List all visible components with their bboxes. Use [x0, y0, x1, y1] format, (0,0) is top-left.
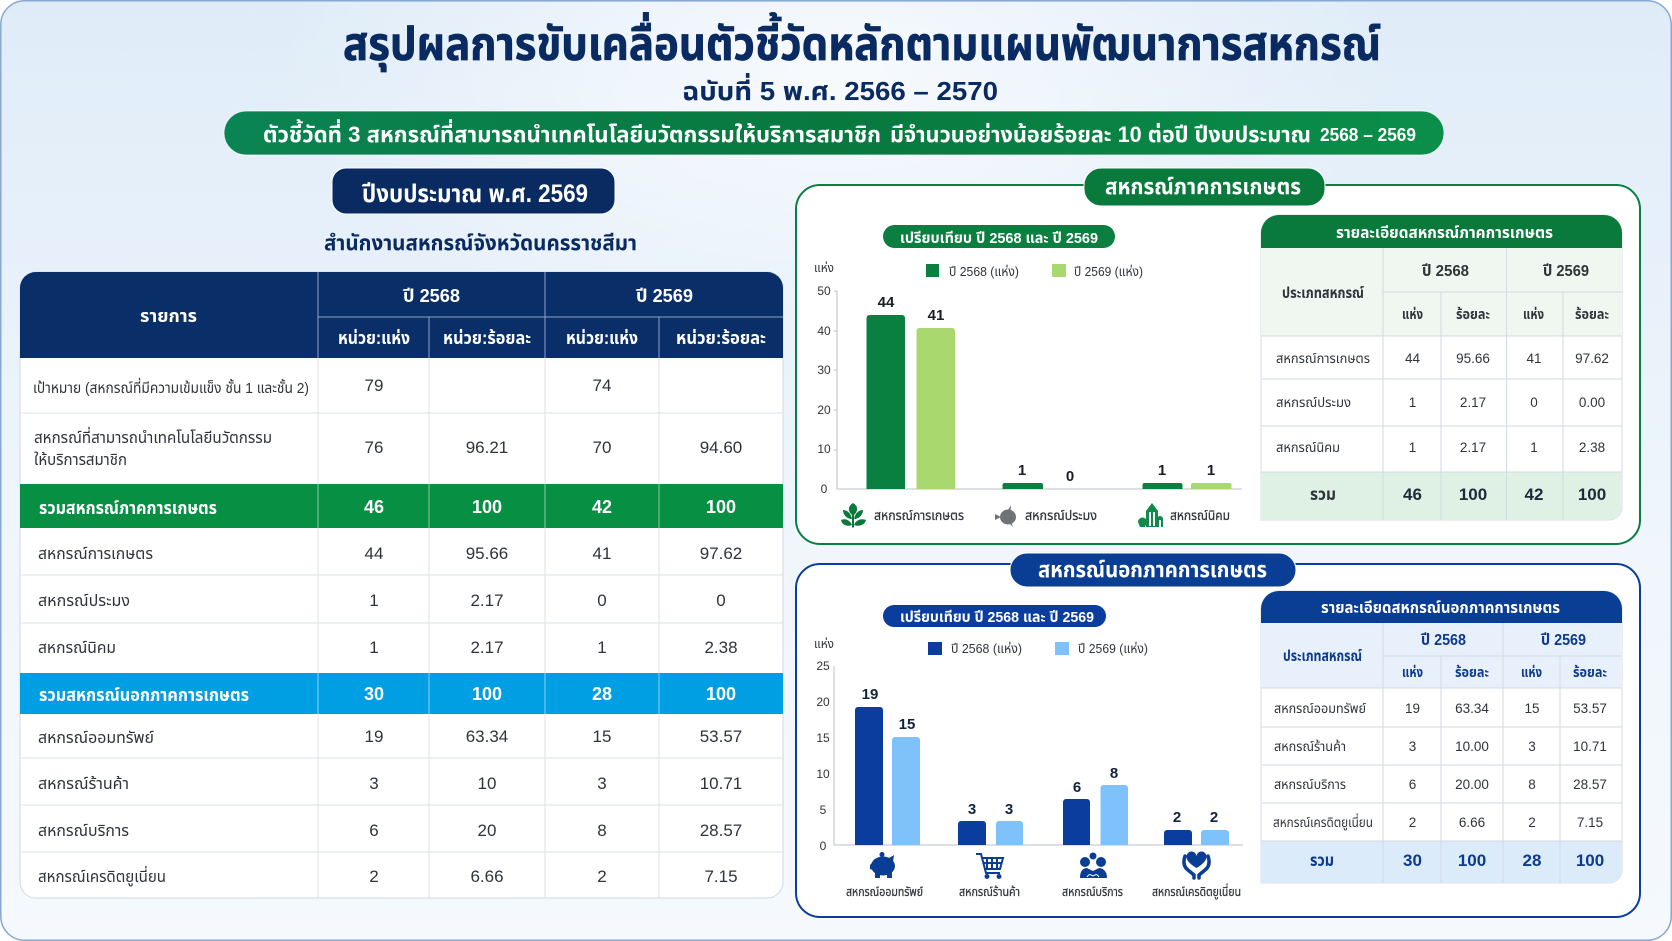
detail table: agricultural: 0.00 — [1579, 395, 1605, 410]
row: settlement — [38, 638, 738, 657]
detail table: agricultural: 1 — [1409, 395, 1416, 410]
row: non-agricultural total: รวมสหกรณ์นอกภาคการเกษตร — [39, 685, 249, 705]
detail table: non-agricultural: 100 — [1458, 851, 1486, 870]
table header: ปี 2568 — [402, 286, 460, 306]
row: innovation cooperatives: ให้บริการสมาชิก — [34, 452, 127, 469]
bar chart: non-agricultural: 3 — [1005, 801, 1013, 818]
detail table: non-agricultural: ร้อยละ — [1455, 664, 1489, 680]
subtitle: ฉบับที่ 5 พ.ศ. 2566 – 2570 — [682, 73, 998, 106]
detail table: non-agricultural: 19 — [1405, 701, 1420, 716]
panel: main table — [20, 272, 783, 898]
row: service: สหกรณ์บริการ — [38, 823, 129, 840]
detail table: agricultural: 44 — [1405, 351, 1420, 366]
row: agriculture — [38, 544, 742, 563]
detail table: agricultural: แห่ง — [1402, 306, 1423, 322]
legend: ปี 2569 (แห่ง) — [1078, 641, 1148, 656]
label: agriculture: สหกรณ์การเกษตร — [874, 508, 964, 523]
fiscal year badge — [332, 168, 615, 214]
detail table: agricultural: 1 — [1409, 440, 1416, 455]
bar chart: non-agricultural: 3 — [968, 801, 976, 818]
row: agriculture: 44 — [365, 544, 383, 563]
bar chart: agricultural: 40 — [817, 324, 831, 338]
bar chart: agricultural: 0 — [1066, 468, 1074, 485]
row: agriculture: สหกรณ์การเกษตร — [38, 546, 153, 563]
table header: หน่วย:ร้อยละ — [443, 328, 531, 348]
detail table: agricultural: 2.38 — [1579, 440, 1605, 455]
detail table: agricultural: ประเภทสหกรณ์ — [1282, 285, 1364, 302]
row: agriculture: 95.66 — [466, 544, 508, 563]
icon: buildings — [1138, 503, 1163, 527]
label: shop: สหกรณ์ร้านค้า — [959, 885, 1020, 899]
detail table: agricultural: สหกรณ์ประมง — [1276, 395, 1351, 410]
bar chart: non-agricultural: 2 — [1173, 809, 1181, 826]
panel heading: สหกรณ์นอกภาคการเกษตร — [1038, 557, 1267, 582]
table header: หน่วย:แห่ง — [566, 328, 638, 348]
bar chart: non-agricultural: 20 — [816, 695, 830, 709]
row: settlement: 1 — [597, 638, 607, 657]
row: credit union: 6.66 — [470, 867, 504, 886]
bars 2568 — [855, 707, 1192, 845]
bar chart: agricultural: 20 — [817, 403, 831, 417]
detail table: agricultural: ปี 2568 — [1421, 263, 1469, 280]
bar chart: non-agricultural — [814, 637, 1243, 853]
detail table: agricultural: สหกรณ์การเกษตร — [1276, 351, 1370, 366]
row: credit union: 2 — [369, 867, 379, 886]
detail table: non-agricultural: 28.57 — [1573, 777, 1607, 792]
row: savings: สหกรณ์ออมทรัพย์ — [38, 730, 154, 747]
table header: หน่วย:ร้อยละ — [676, 328, 766, 348]
icon: shopping cart — [976, 854, 1003, 878]
detail table: agricultural: 2.17 — [1460, 440, 1486, 455]
panel heading — [1010, 553, 1296, 587]
row: target: เป้าหมาย (สหกรณ์ที่มีความเข้มแข็ง ชั้น 1 และชั้น 2) — [33, 377, 309, 397]
row: non-agricultural total — [20, 673, 783, 714]
bar chart: agricultural — [814, 261, 1242, 496]
row: settlement: สหกรณ์นิคม — [38, 640, 116, 657]
row: innovation cooperatives: 76 — [365, 438, 383, 457]
bar chart: non-agricultural: 10 — [816, 767, 830, 781]
bar chart: non-agricultural: 15 — [899, 716, 915, 733]
table header: รายการ — [140, 306, 197, 326]
detail table: agricultural: 95.66 — [1456, 351, 1490, 366]
title: สรุปผลการขับเคลื่อนตัวชี้วัดหลักตามแผนพัฒนาการสหกรณ์ — [343, 12, 1381, 72]
row: savings: 53.57 — [700, 727, 742, 746]
table grid — [20, 358, 783, 898]
detail table: non-agricultural: 15 — [1524, 701, 1540, 716]
label: credit union: สหกรณ์เครดิตยูเนี่ยน — [1152, 883, 1241, 899]
detail table: non-agricultural: 2 — [1528, 815, 1536, 830]
row: shop — [38, 774, 742, 793]
row: shop: 10.71 — [700, 774, 742, 793]
row: fishery: 0 — [597, 591, 607, 610]
row: shop: 10 — [478, 774, 496, 793]
row: shop: สหกรณ์ร้านค้า — [38, 776, 129, 793]
detail table: non-agricultural: 6.66 — [1459, 815, 1485, 830]
bar chart: non-agricultural: 2 — [1210, 809, 1218, 826]
label: settlement: สหกรณ์นิคม — [1170, 508, 1230, 523]
row: fishery: 2.17 — [470, 591, 504, 610]
chart heading: เปรียบเทียบ ปี 2568 และ ปี 2569 — [900, 230, 1098, 247]
detail table: agricultural: 2.17 — [1460, 395, 1486, 410]
row: fishery — [38, 591, 726, 610]
row: service: 8 — [597, 821, 607, 840]
detail table: non-agricultural: 53.57 — [1573, 701, 1607, 716]
detail table: non-agricultural: 30 — [1403, 851, 1422, 870]
detail table: agricultural: 1 — [1530, 440, 1538, 455]
legend: ปี 2568 (แห่ง) — [949, 264, 1019, 279]
indicator banner: มีจำนวนอย่างน้อยร้อยละ 10 ต่อปี ปีงบประมาณ — [890, 122, 1311, 147]
label: fishery: สหกรณ์ประมง — [1025, 508, 1097, 523]
detail table: non-agricultural: ร้อยละ — [1573, 664, 1607, 680]
bars 2569 — [916, 328, 1232, 489]
label: service: สหกรณ์บริการ — [1062, 885, 1123, 899]
detail table: agricultural: 0 — [1530, 395, 1538, 410]
bar chart: non-agricultural: 19 — [862, 686, 878, 703]
row: agricultural total: 46 — [364, 497, 384, 517]
icon: leaves — [841, 503, 866, 528]
row: agricultural total: 100 — [472, 497, 502, 517]
row: fishery: 1 — [369, 591, 379, 610]
detail table: non-agricultural: 2 — [1409, 815, 1416, 830]
row: non-agricultural total: 100 — [472, 684, 502, 704]
detail table: agricultural: ร้อยละ — [1456, 306, 1490, 322]
detail table: non-agricultural: แห่ง — [1521, 664, 1542, 680]
row: innovation cooperatives: 70 — [593, 438, 611, 457]
detail table: agricultural: ปี 2569 — [1542, 263, 1589, 280]
legend — [928, 641, 1148, 656]
row: innovation cooperatives: สหกรณ์ที่สามารถนำเทคโนโลยีนวัตกรรม — [34, 426, 272, 447]
detail table: non-agricultural: 20.00 — [1455, 777, 1489, 792]
detail table: non-agricultural: ปี 2568 — [1420, 632, 1466, 649]
detail table: non-agricultural: สหกรณ์บริการ — [1274, 777, 1346, 792]
bar chart: non-agricultural: 8 — [1110, 765, 1118, 782]
row: savings: 63.34 — [466, 727, 508, 746]
panel: non-agricultural cooperatives — [796, 553, 1640, 917]
detail table: agricultural: แห่ง — [1523, 306, 1544, 322]
detail table: agricultural: 100 — [1578, 485, 1606, 504]
detail table: non-agricultural: 3 — [1528, 739, 1536, 754]
indicator banner: ตัวชี้วัดที่ 3 สหกรณ์ที่สามารถนำเทคโนโลยีนวัตกรรมให้บริการสมาชิก — [263, 119, 881, 147]
table header: ปี 2569 — [635, 286, 693, 306]
detail table: non-agricultural: 7.15 — [1577, 815, 1603, 830]
detail table: agricultural: 97.62 — [1575, 351, 1609, 366]
row: credit union: สหกรณ์เครดิตยูเนี่ยน — [38, 865, 166, 886]
row: shop: 3 — [597, 774, 607, 793]
detail table: agricultural: 100 — [1459, 485, 1487, 504]
detail table: non-agricultural: 10.00 — [1455, 739, 1489, 754]
bars 2569 — [892, 737, 1229, 845]
bar chart: non-agricultural: แห่ง — [814, 637, 834, 651]
detail table: non-agricultural: สหกรณ์ออมทรัพย์ — [1274, 701, 1366, 716]
bar chart: agricultural: 1 — [1018, 462, 1026, 479]
icon: piggy bank — [870, 852, 895, 878]
detail table: non-agricultural: สหกรณ์เครดิตยูเนี่ยน — [1273, 813, 1373, 831]
row: innovation cooperatives — [34, 426, 742, 469]
indicator banner — [224, 111, 1444, 155]
chart heading: เปรียบเทียบ ปี 2568 และ ปี 2569 — [900, 609, 1094, 626]
row: settlement: 2.17 — [470, 638, 504, 657]
detail table: non-agricultural: 3 — [1409, 739, 1416, 754]
icon: fish — [995, 505, 1016, 527]
detail table: agricultural: 42 — [1525, 485, 1543, 504]
bar chart: agricultural: 1 — [1207, 462, 1215, 479]
bar chart: agricultural: 10 — [817, 442, 831, 456]
detail table: non-agricultural: รวม — [1310, 851, 1334, 870]
bar chart: non-agricultural: 15 — [816, 731, 830, 745]
bar chart: non-agricultural: 6 — [1073, 779, 1081, 796]
row: target: 74 — [593, 376, 611, 395]
row: service: 6 — [369, 821, 379, 840]
row: savings — [38, 727, 742, 747]
detail table: non-agricultural: 63.34 — [1455, 701, 1489, 716]
detail table: agricultural: รายละเอียดสหกรณ์ภาคการเกษตร — [1336, 225, 1553, 242]
row: agricultural total: 100 — [706, 497, 736, 517]
office name: สำนักงานสหกรณ์จังหวัดนครราชสีมา — [324, 232, 637, 255]
bar chart: agricultural: 41 — [928, 307, 944, 324]
row: settlement: 2.38 — [704, 638, 738, 657]
bar chart: non-agricultural: 5 — [820, 803, 827, 817]
indicator banner: 2568 – 2569 — [1320, 125, 1416, 145]
row: service: 28.57 — [700, 821, 742, 840]
row: agriculture: 97.62 — [700, 544, 742, 563]
row: agricultural total: 42 — [592, 497, 612, 517]
bar chart: agricultural: 1 — [1158, 462, 1166, 479]
bars 2568 — [866, 315, 1182, 489]
detail table: non-agricultural: แห่ง — [1402, 664, 1423, 680]
detail table: non-agricultural: 28 — [1523, 851, 1541, 870]
panel: agricultural cooperatives — [796, 168, 1640, 544]
bar chart: non-agricultural: 25 — [816, 659, 830, 673]
row: fishery: 0 — [716, 591, 726, 610]
detail table: non-agricultural: 6 — [1409, 777, 1416, 792]
row: innovation cooperatives: 94.60 — [700, 438, 742, 457]
panel heading: สหกรณ์ภาคการเกษตร — [1105, 174, 1301, 199]
row: savings: 15 — [593, 727, 611, 746]
detail table: non-agricultural: รายละเอียดสหกรณ์นอกภาคการเกษตร — [1321, 600, 1560, 617]
label: savings: สหกรณ์ออมทรัพย์ — [846, 885, 923, 899]
detail table: agricultural: สหกรณ์นิคม — [1276, 440, 1340, 455]
detail table: agricultural: ร้อยละ — [1575, 306, 1609, 322]
table header: หน่วย:แห่ง — [338, 328, 410, 348]
row: service — [38, 821, 742, 840]
bar chart: agricultural: แห่ง — [814, 261, 834, 275]
chart heading — [883, 225, 1115, 248]
detail table: non-agricultural: 8 — [1528, 777, 1536, 792]
row: agricultural total: รวมสหกรณ์ภาคการเกษตร — [39, 498, 217, 518]
table header — [20, 272, 783, 358]
row: credit union: 7.15 — [704, 867, 738, 886]
legend — [926, 264, 1143, 279]
fiscal year badge: ปีงบประมาณ พ.ศ. 2569 — [362, 180, 588, 208]
detail table: non-agricultural: สหกรณ์ร้านค้า — [1274, 739, 1346, 754]
icon: service people — [1080, 852, 1107, 878]
detail table: non-agricultural: ปี 2569 — [1540, 632, 1586, 649]
bar chart: agricultural: 0 — [821, 482, 828, 496]
detail table: agricultural — [1261, 215, 1622, 520]
row: non-agricultural total: 100 — [706, 684, 736, 704]
row: agriculture: 41 — [593, 544, 611, 563]
row: settlement: 1 — [369, 638, 379, 657]
detail table: agricultural: รวม — [1310, 485, 1336, 504]
row: credit union — [38, 865, 738, 886]
panel heading — [1084, 168, 1325, 206]
row: savings: 19 — [365, 727, 383, 746]
detail table: agricultural: 46 — [1403, 485, 1422, 504]
bar chart: agricultural: 30 — [817, 363, 831, 377]
row: non-agricultural total: 30 — [364, 684, 384, 704]
row: shop: 3 — [369, 774, 379, 793]
bar chart: agricultural: 44 — [878, 294, 895, 311]
icon: caring hands — [1184, 851, 1209, 878]
detail table: agricultural: 41 — [1526, 351, 1542, 366]
row: innovation cooperatives: 96.21 — [466, 438, 508, 457]
detail table: non-agricultural — [1261, 591, 1622, 883]
row: non-agricultural total: 28 — [592, 684, 612, 704]
row: service: 20 — [478, 821, 496, 840]
row: agricultural total — [20, 484, 783, 528]
row: credit union: 2 — [597, 867, 607, 886]
detail table: non-agricultural: 100 — [1576, 851, 1604, 870]
bar chart: agricultural: 50 — [817, 284, 831, 298]
detail table: non-agricultural: ประเภทสหกรณ์ — [1283, 648, 1362, 665]
legend: ปี 2569 (แห่ง) — [1074, 264, 1143, 279]
detail table: non-agricultural: 10.71 — [1573, 739, 1607, 754]
row: fishery: สหกรณ์ประมง — [38, 593, 130, 610]
legend: ปี 2568 (แห่ง) — [951, 641, 1022, 656]
bar chart: non-agricultural: 0 — [820, 839, 827, 853]
row: target — [33, 376, 611, 397]
row: target: 79 — [365, 376, 383, 395]
